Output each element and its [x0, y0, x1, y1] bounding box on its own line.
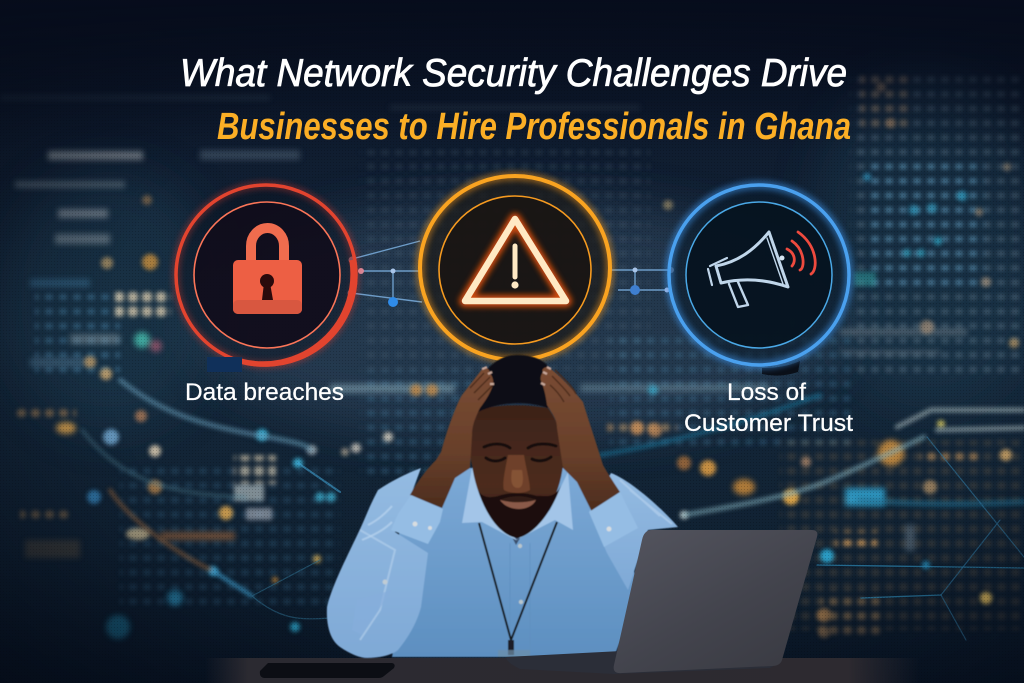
label: loss of customer trust: [684, 379, 853, 437]
title: What Network Security Challenges Drive: [180, 52, 847, 95]
right sleeve: [589, 473, 678, 590]
neck shadow and collar: [478, 470, 560, 545]
left sleeve: [327, 468, 428, 658]
icon: megaphone: [708, 232, 815, 307]
desk: [205, 658, 920, 683]
cuffs: [391, 495, 443, 544]
panel: warning circle: [419, 175, 611, 361]
label: data breaches: Data breaches: [185, 379, 344, 406]
icon: warning triangle: [465, 219, 566, 301]
left hand and forearm: [410, 367, 493, 508]
title: [180, 52, 851, 148]
panel: data breaches circle: [175, 184, 357, 366]
blue patch under red ring: [207, 357, 242, 372]
illustration: stressed man: [327, 355, 678, 658]
label: loss of customer trust: Loss of: [727, 379, 806, 406]
right hand and forearm: [541, 367, 620, 512]
title: Businesses to Hire Professionals in Ghana: [217, 106, 851, 148]
lanyard: [479, 522, 557, 640]
icon: padlock: [233, 228, 302, 314]
face: [470, 405, 564, 538]
hair: [478, 355, 550, 412]
torso: [392, 468, 640, 657]
placket and buttons: [510, 543, 530, 657]
laptop: [506, 530, 817, 674]
panel: customer trust circle: [668, 184, 850, 376]
phone on desk: [260, 663, 395, 678]
label: loss of customer trust: Customer Trust: [684, 410, 853, 437]
connector lines between circles: [348, 241, 674, 307]
